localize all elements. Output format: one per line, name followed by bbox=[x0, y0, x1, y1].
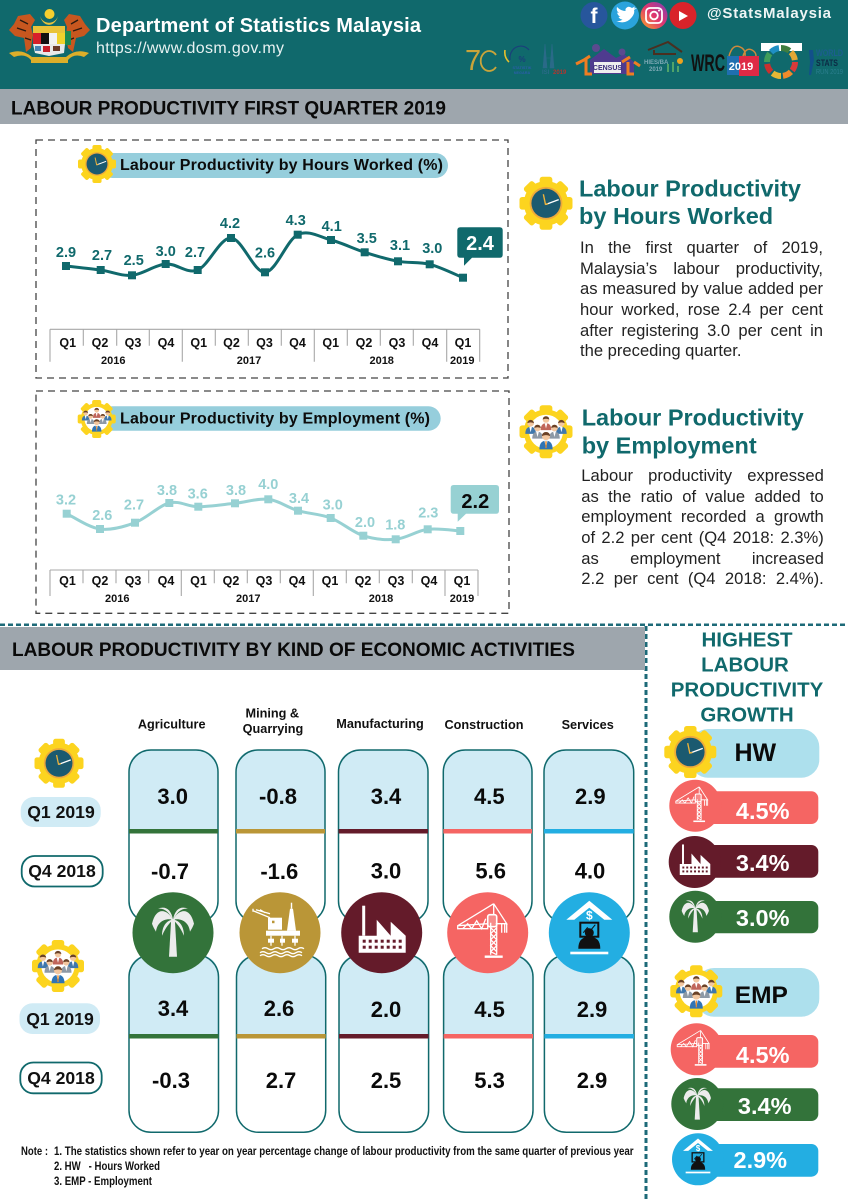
footnote bbox=[21, 1146, 634, 1188]
logo: HIES bbox=[644, 42, 683, 73]
time axis: Q4 bbox=[289, 336, 306, 350]
logo: statistics day: STATISTIK bbox=[512, 66, 532, 70]
heading: labour productivity by employment bbox=[582, 405, 804, 458]
time axis: Q4 bbox=[158, 574, 174, 588]
line chart: 2.3 bbox=[418, 506, 438, 522]
heading: highest labour productivity growth: HIGHEST bbox=[701, 629, 793, 652]
time axis: Q1 bbox=[190, 574, 207, 588]
icon: agriculture circle bbox=[132, 892, 214, 973]
sector column headings: Services bbox=[562, 718, 614, 732]
time axis: Q1 bbox=[454, 574, 470, 588]
section heading bar: economic activities bbox=[0, 627, 645, 670]
time axis: 2016 bbox=[105, 593, 130, 605]
card: manufacturing employment: 2.0 bbox=[371, 997, 401, 1022]
card: services hours worked bbox=[544, 750, 634, 923]
bar: EMP construction 4.5% bbox=[671, 1023, 818, 1075]
line chart: 2.7 bbox=[185, 245, 205, 261]
bar: EMP agriculture 3.4%: 3.4% bbox=[738, 1093, 792, 1119]
sector column headings: Mining & bbox=[246, 706, 299, 720]
card: agriculture employment: -0.3 bbox=[152, 1068, 190, 1093]
footnote: 3. EMP - Employment bbox=[54, 1176, 152, 1188]
bar: HW agriculture 3.0%: 3.0% bbox=[736, 905, 790, 931]
card: services hours worked: 4.0 bbox=[575, 858, 605, 884]
line chart: 3.6 bbox=[188, 486, 208, 502]
time axis: Q2 bbox=[356, 336, 372, 350]
logo: 70 years bbox=[465, 45, 496, 77]
line chart: 3.2 bbox=[56, 492, 76, 508]
icon: services circle bbox=[549, 892, 630, 973]
text block: employment description: as the ratio of value added to bbox=[581, 487, 824, 506]
line chart: 4.2 bbox=[220, 216, 240, 232]
time axis: Q2 bbox=[92, 574, 108, 588]
line chart: 2.9 bbox=[56, 245, 76, 261]
card: construction hours worked bbox=[443, 750, 532, 923]
icon: youtube bbox=[670, 2, 696, 29]
time axis: 2016 bbox=[101, 355, 126, 367]
label: Q4 2018 employment bbox=[20, 1062, 102, 1093]
time axis: Q4 bbox=[422, 336, 438, 350]
bar: EMP services 2.9%: 2.9% bbox=[734, 1147, 787, 1173]
text block: employment description: as employment increased bbox=[581, 549, 824, 568]
label: Q4 2018 hours worked bbox=[22, 856, 103, 886]
bar: HW construction 4.5% bbox=[669, 780, 818, 832]
card: manufacturing employment bbox=[339, 955, 429, 1132]
text block: employment description bbox=[581, 466, 824, 588]
line chart: 4.1 bbox=[322, 219, 342, 235]
line chart: 3.5 bbox=[357, 231, 377, 247]
heading: highest labour productivity growth: PRODUCTIVITY bbox=[671, 679, 824, 702]
chart title pill bbox=[78, 400, 441, 438]
icon: clock gear large bbox=[520, 177, 572, 230]
time axis: Q1 bbox=[322, 336, 339, 350]
line chart: 4.0 bbox=[258, 477, 278, 493]
time axis: Q4 bbox=[289, 574, 305, 588]
line chart: 3.1 bbox=[390, 238, 410, 254]
icon: manufacturing circle bbox=[341, 892, 422, 973]
icon: clock gear, hours worked rows bbox=[34, 739, 84, 788]
time axis: Q1 bbox=[59, 574, 76, 588]
card: services employment bbox=[544, 955, 634, 1132]
logo: 70 years: 7 bbox=[465, 45, 481, 77]
line chart: 3.0 bbox=[156, 244, 176, 260]
section divider lines bbox=[0, 625, 848, 1200]
card: agriculture hours worked: 3.0 bbox=[157, 784, 188, 809]
bar: EMP services 2.9% bbox=[672, 1133, 818, 1185]
label: Q1 2019 employment bbox=[20, 1003, 100, 1034]
bar: EMP agriculture 3.4% bbox=[671, 1078, 818, 1130]
card: services employment: 2.9 bbox=[577, 997, 607, 1022]
icon: instagram bbox=[640, 2, 668, 29]
heading: highest labour productivity growth bbox=[671, 629, 824, 726]
badge: HW bbox=[664, 726, 819, 778]
text block: employment description: employment recorded a growth bbox=[581, 507, 824, 526]
callout 2.4 bbox=[457, 227, 503, 266]
sector column headings: Agriculture bbox=[138, 717, 206, 731]
text block: hours worked description bbox=[580, 238, 823, 360]
badge: EMP bbox=[670, 965, 819, 1017]
line chart: 2.6 bbox=[92, 508, 112, 524]
chart title pill bbox=[78, 145, 448, 183]
section heading bar: first quarter bbox=[0, 89, 848, 124]
card: services hours worked: 2.9 bbox=[575, 784, 606, 809]
label: Q1 2019 employment: Q1 2019 bbox=[26, 1009, 94, 1029]
logo: ISI 2019: ISI bbox=[542, 70, 550, 76]
section heading bar: economic activities: LABOUR PRODUCTIVITY BY KIND OF ECONOMIC ACTIVITIES bbox=[12, 639, 575, 661]
time axis: Q2 bbox=[355, 574, 371, 588]
line chart: 3.0 bbox=[323, 498, 343, 514]
card: mining hours worked: -1.6 bbox=[260, 859, 298, 884]
label: Q1 2019 hours worked bbox=[21, 797, 101, 827]
callout 2.2 bbox=[451, 485, 499, 522]
card: agriculture employment: 3.4 bbox=[158, 996, 189, 1021]
panel: chart hours worked bbox=[36, 140, 508, 378]
sector column headings: Construction bbox=[445, 718, 523, 732]
bar: HW manufacturing 3.4% bbox=[669, 836, 818, 888]
line chart: 3.0 bbox=[422, 241, 442, 257]
time axis: 2019 bbox=[450, 355, 475, 367]
time axis: Q3 bbox=[256, 574, 272, 588]
time axis: Q1 bbox=[190, 336, 207, 350]
badge: EMP: EMP bbox=[735, 982, 788, 1009]
text block: hours worked description: Malaysia’s labour productivity, bbox=[580, 259, 823, 278]
sector column headings bbox=[138, 706, 614, 736]
logo: ISI 2019 bbox=[542, 44, 567, 76]
logo: HIES: 2019 bbox=[649, 67, 663, 73]
panel: chart employment bbox=[36, 391, 509, 613]
label: Q4 2018 employment: Q4 2018 bbox=[27, 1068, 95, 1088]
time axis: Q2 bbox=[92, 336, 108, 350]
logo: HIES: HIES/BA bbox=[644, 60, 669, 66]
logo: statistics day: NEGARA bbox=[514, 71, 530, 75]
time axis: 2017 bbox=[236, 593, 261, 605]
card: construction employment: 4.5 bbox=[474, 997, 505, 1022]
logo: census: CENSUS bbox=[593, 65, 622, 72]
logo: census bbox=[576, 44, 640, 74]
icon: construction circle bbox=[447, 892, 528, 973]
time axis bbox=[50, 329, 480, 367]
logo: WRC 2019: 2019 bbox=[729, 61, 753, 73]
time axis: Q1 bbox=[59, 336, 76, 350]
card: mining hours worked: -0.8 bbox=[259, 784, 297, 809]
time axis: Q3 bbox=[256, 336, 273, 350]
logo: statistics day: % bbox=[518, 55, 526, 64]
text block: employment description: 2.2 per cent (Q4 2018: 2.4%). bbox=[581, 569, 824, 588]
time axis: Q3 bbox=[389, 336, 405, 350]
chart title pill: Labour Productivity by Employment (%) bbox=[120, 410, 430, 428]
time axis: Q1 bbox=[322, 574, 338, 588]
time axis: Q2 bbox=[223, 574, 239, 588]
time axis: 2019 bbox=[450, 593, 474, 605]
line chart: 2.7 bbox=[92, 248, 112, 264]
footnote: Note : bbox=[21, 1146, 48, 1158]
label: Q4 2018 hours worked: Q4 2018 bbox=[28, 861, 96, 881]
line chart: 3.8 bbox=[157, 483, 177, 499]
text block: employment description: Labour productivity expressed bbox=[581, 466, 824, 485]
department name: Department of Statistics Malaysia bbox=[96, 15, 422, 37]
callout 2.4: 2.4 bbox=[466, 233, 495, 255]
time axis bbox=[50, 570, 478, 605]
time axis: 2018 bbox=[369, 355, 394, 367]
text block: hours worked description: after registering 3.0 per cent in bbox=[580, 321, 823, 340]
label: Q1 2019 hours worked: Q1 2019 bbox=[27, 802, 95, 822]
bar: HW construction 4.5%: 4.5% bbox=[736, 798, 790, 824]
logo: SDG wheel bbox=[761, 42, 802, 82]
logo: WRC 2019: WRC bbox=[691, 50, 725, 77]
card: construction hours worked: 4.5 bbox=[474, 784, 505, 809]
card: agriculture employment bbox=[129, 955, 218, 1132]
text block: employment description: of 2.2 per cent (Q4 2018: 2.3%) bbox=[581, 528, 824, 547]
line chart: 3.8 bbox=[226, 483, 246, 499]
card: manufacturing employment: 2.5 bbox=[371, 1068, 401, 1093]
logo: world stats run: STATS bbox=[816, 58, 838, 69]
heading: labour productivity by employment: by Employment bbox=[582, 432, 757, 458]
line chart: 2.5 bbox=[124, 253, 144, 269]
card: manufacturing hours worked: 3.0 bbox=[371, 858, 401, 884]
text block: hours worked description: hour worked, rose 2.4 per cent bbox=[580, 300, 823, 319]
icon: mining circle bbox=[240, 892, 320, 973]
time axis: Q4 bbox=[158, 336, 174, 350]
line chart: 2.0 bbox=[355, 515, 375, 531]
line chart: 2.7 bbox=[124, 498, 144, 514]
icon: coat of arms bbox=[9, 9, 90, 63]
card: construction employment: 5.3 bbox=[474, 1068, 505, 1093]
text block: hours worked description: In the first quarter of 2019, bbox=[580, 238, 823, 257]
card: construction hours worked: 5.6 bbox=[475, 858, 506, 884]
icon: people gear large bbox=[520, 405, 572, 458]
line chart: 3.4 bbox=[289, 491, 309, 507]
time axis: Q3 bbox=[125, 574, 141, 588]
logo: statistics day bbox=[505, 46, 532, 75]
icon: people gear, employment rows bbox=[32, 940, 84, 992]
website: https://www.dosm.gov.my bbox=[96, 40, 284, 57]
section heading bar: first quarter: LABOUR PRODUCTIVITY FIRST QUARTER 2019 bbox=[11, 98, 446, 120]
heading: highest labour productivity growth: LABOUR bbox=[701, 654, 789, 677]
time axis: Q1 bbox=[455, 336, 471, 350]
card: manufacturing hours worked bbox=[338, 750, 428, 923]
card: mining hours worked bbox=[236, 750, 325, 923]
logo: world stats run bbox=[809, 48, 843, 76]
icon: twitter bbox=[611, 2, 639, 30]
heading: labour productivity by hours worked: by Hours Worked bbox=[579, 203, 773, 229]
heading: labour productivity by employment: Labour Productivity bbox=[582, 405, 804, 431]
card: mining employment: 2.7 bbox=[266, 1068, 296, 1093]
bar: HW agriculture 3.0% bbox=[669, 891, 818, 943]
header band bbox=[0, 0, 848, 89]
card: mining employment: 2.6 bbox=[264, 996, 294, 1021]
footnote: 1. The statistics shown refer to year on year percentage change of labour productivity from the same quarter of previous year bbox=[54, 1146, 634, 1158]
time axis: 2017 bbox=[237, 355, 261, 367]
heading: highest labour productivity growth: GROWTH bbox=[700, 703, 794, 726]
card: agriculture hours worked: -0.7 bbox=[151, 859, 189, 884]
icon: facebook: f bbox=[590, 5, 598, 28]
bar: HW manufacturing 3.4%: 3.4% bbox=[736, 850, 790, 876]
card: manufacturing hours worked: 3.4 bbox=[371, 784, 402, 809]
time axis: Q3 bbox=[388, 574, 404, 588]
time axis: Q4 bbox=[421, 574, 437, 588]
time axis: 2018 bbox=[369, 593, 393, 605]
badge: HW: HW bbox=[734, 739, 777, 767]
sector column headings: Quarrying bbox=[243, 722, 303, 736]
card: agriculture hours worked bbox=[129, 750, 218, 923]
icon: facebook bbox=[580, 2, 608, 29]
line chart: 2.6 bbox=[255, 246, 275, 262]
line chart: 1.8 bbox=[385, 518, 405, 534]
text block: hours worked description: the preceding quarter. bbox=[580, 341, 741, 360]
card: construction employment bbox=[444, 955, 533, 1132]
card: mining employment bbox=[236, 955, 326, 1132]
text block: hours worked description: as measured by value added per bbox=[580, 279, 823, 298]
line chart: 4.3 bbox=[286, 213, 306, 229]
bar: EMP construction 4.5%: 4.5% bbox=[736, 1042, 790, 1068]
footnote: 2. HW - Hours Worked bbox=[54, 1161, 160, 1173]
sector column headings: Manufacturing bbox=[336, 717, 424, 731]
chart title pill: Labour Productivity by Hours Worked (%) bbox=[120, 157, 443, 174]
logo: ISI 2019: 2019 bbox=[553, 70, 567, 76]
social handle: @StatsMalaysia bbox=[707, 5, 832, 22]
line chart bbox=[56, 213, 467, 282]
heading: labour productivity by hours worked: Labour Productivity bbox=[579, 176, 801, 202]
line chart bbox=[56, 477, 464, 543]
callout 2.2: 2.2 bbox=[461, 491, 489, 513]
heading: labour productivity by hours worked bbox=[579, 176, 801, 229]
card: services employment: 2.9 bbox=[577, 1068, 607, 1093]
time axis: Q2 bbox=[223, 336, 240, 350]
time axis: Q3 bbox=[125, 336, 141, 350]
